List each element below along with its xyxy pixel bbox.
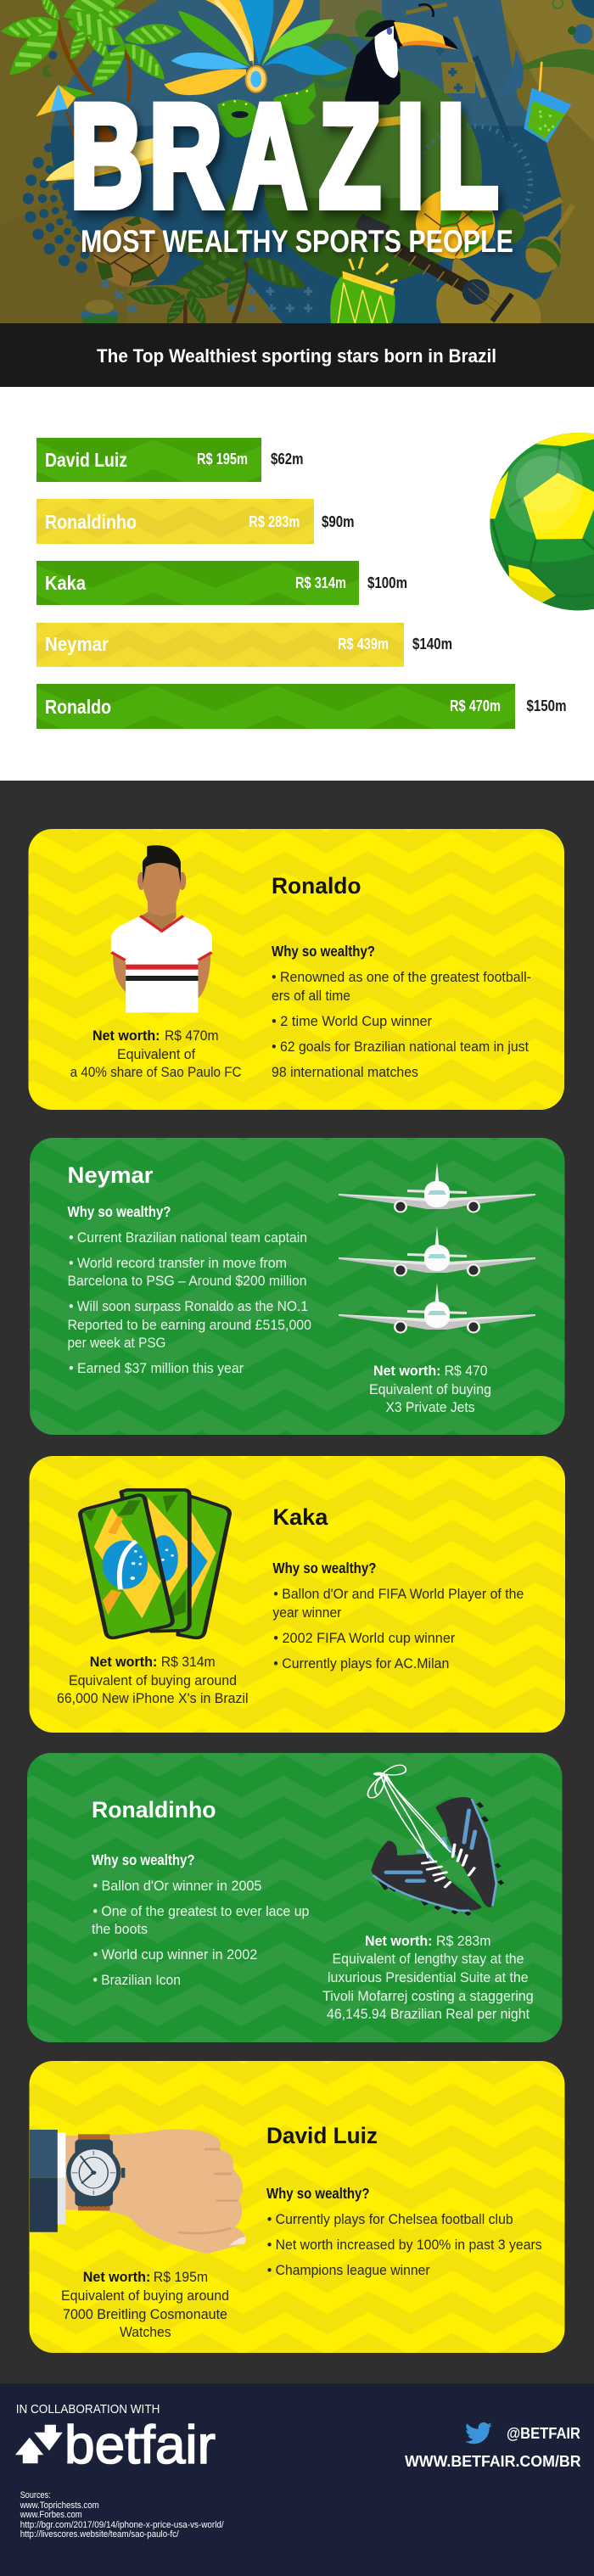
sources: Sources: [20,2490,51,2500]
net worth caption [57,1654,248,1706]
why so wealthy list: per week at PSG [68,1335,166,1351]
net worth caption [322,1933,534,2022]
why so wealthy list: Why so wealthy? [266,2185,370,2202]
right half [330,4,573,323]
net worth caption: Equivalent of [117,1046,195,1062]
net worth caption: Equivalent of buying around [61,2288,229,2304]
collaboration label: IN COLLABORATION WITH [16,2402,160,2416]
why so wealthy list: Why so wealthy? [92,1851,195,1868]
icon: hanging football boots [367,1765,502,1915]
heading bar [0,323,594,387]
bar: Ronaldo: R$ 470m [450,697,501,714]
net worth caption: a 40% share of Sao Paulo FC [70,1064,242,1080]
bright football [416,188,495,259]
why so wealthy list [266,2185,542,2278]
why so wealthy list: year winner [272,1604,342,1621]
net worth caption: R$ 470 [445,1363,488,1379]
net worth caption: R$ 470m [165,1028,219,1044]
dots [23,36,89,273]
why so wealthy list: Reported to be earning around £515,000 [68,1317,311,1333]
net worth caption: 66,000 New iPhone X's in Brazil [57,1690,248,1706]
umbrella [66,112,75,138]
bar: David Luiz: R$ 195m [197,451,248,468]
twitter handle: @BETFAIR [507,2425,580,2442]
headdress feathers [205,0,255,66]
why so wealthy list: • Current Brazilian national team captain [69,1229,307,1246]
net worth caption: Tivoli Mofarrej costing a staggering [322,1988,534,2004]
bar: Kaka [36,561,407,605]
icon: twitter bird [465,2422,492,2444]
icon: green and yellow football [486,430,594,617]
why so wealthy list: • 2002 FIFA World cup winner [273,1630,456,1646]
why so wealthy list: • Currently plays for AC.Milan [273,1655,449,1672]
hero banner [0,0,594,328]
hero illustration: carnival scene [0,0,594,328]
why so wealthy list: ers of all time [272,988,350,1004]
net worth caption: Net worth: [83,2269,150,2285]
bar: Neymar: $140m [412,636,452,652]
bar: Kaka: Kaka [45,572,86,594]
bar: Ronaldo: $150m [526,697,567,714]
net worth caption [70,1028,242,1080]
name heading: David Luiz [266,2123,378,2148]
net worth caption [61,2269,229,2340]
net worth caption: Equivalent of lengthy stay at the [333,1951,524,1967]
net worth caption: Net worth: [373,1363,441,1379]
maracas [520,199,562,221]
subtitle: most wealthy sports people: MOST WEALTHY SPORTS PEOPLE [81,224,513,259]
why so wealthy list: • Net worth increased by 100% in past 3 years [267,2237,542,2253]
palm fronds [10,21,59,75]
bar: Kaka: R$ 314m [295,574,346,591]
name heading: Ronaldo [272,873,361,899]
net worth caption: Net worth: [90,1654,157,1670]
why so wealthy list: • 2 time World Cup winner [272,1013,432,1029]
icon: three private jets [339,1162,535,1334]
why so wealthy list: • World record transfer in move from [69,1255,287,1271]
name heading: Neymar [68,1162,154,1188]
panel: Ronaldo [29,829,564,1110]
plus marks [101,280,312,312]
palm trunks [58,21,93,95]
panel: wealth ranking bar chart [0,387,594,781]
why so wealthy list: • Renowned as one of the greatest football- [272,969,531,985]
why so wealthy list: Why so wealthy? [272,943,375,960]
net worth caption: 7000 Breitling Cosmonaute [63,2306,227,2322]
bar: Ronaldinho [36,499,355,544]
toucan [406,4,447,13]
bar: David Luiz: David Luiz [45,449,127,471]
bar: Ronaldinho: Ronaldinho [45,511,137,533]
bar: Ronaldo: Ronaldo [45,696,111,718]
sources: www.Toprichests.com [20,2500,99,2511]
bar: David Luiz [36,438,304,482]
why so wealthy list: • Ballon d'Or winner in 2005 [92,1878,261,1894]
panel: Ronaldinho [27,1753,562,2042]
sources: http://livescores.website/team/sao-paulo-fc/ [20,2529,180,2540]
why so wealthy list: • Will soon surpass Ronaldo as the NO.1 [69,1298,308,1314]
net worth caption: R$ 314m [161,1654,216,1670]
net worth caption [369,1363,491,1415]
why so wealthy list: Why so wealthy? [68,1203,171,1220]
net worth caption: X3 Private Jets [385,1399,475,1415]
why so wealthy list [92,1851,309,1988]
bar: David Luiz: $62m [271,451,304,468]
bar: Neymar: R$ 439m [338,636,389,652]
website: WWW.BETFAIR.COM/BR [405,2453,581,2470]
icon: wristwatch on arm [30,2129,246,2254]
bar: Ronaldinho: $90m [322,513,355,530]
bar: Ronaldinho: R$ 283m [249,513,300,530]
why so wealthy list: Why so wealthy? [272,1560,376,1576]
logo: betfair: betfair [64,2416,216,2475]
sources: www.Forbes.com [20,2510,82,2520]
why so wealthy list [68,1203,311,1376]
why so wealthy list: Barcelona to PSG – Around $200 million [68,1273,307,1289]
icon: three iPhones with Brazilian flag [80,1490,230,1638]
dark lower palms [233,261,246,323]
net worth caption: R$ 195m [154,2269,208,2285]
small drum left [81,314,119,323]
panel: Neymar [30,1138,565,1435]
dim football left [93,216,170,287]
why so wealthy list: • World cup winner in 2002 [92,1946,257,1963]
heading text: The Top Wealthiest sporting stars born in Brazil [97,345,496,367]
sources: http://bgr.com/2017/09/14/iphone-x-price-usa-vs-world/ [20,2520,225,2530]
name heading: Ronaldinho [92,1797,216,1823]
why so wealthy list: • Currently plays for Chelsea football club [267,2211,513,2227]
why so wealthy list: • Brazilian Icon [92,1972,181,1988]
why so wealthy list: • One of the greatest to ever lace up [92,1903,309,1919]
panel: Kaka [29,1456,565,1733]
bar: Neymar: Neymar [45,633,109,655]
why so wealthy list: the boots [92,1921,148,1937]
net worth caption: Net worth: [92,1028,160,1044]
net worth caption: Equivalent of buying around [69,1672,237,1688]
carnival mask [218,99,257,137]
net worth caption: Watches [120,2324,171,2340]
why so wealthy list [272,1560,524,1672]
bar: Neymar [36,623,452,667]
why so wealthy list: 98 international matches [272,1064,418,1080]
bar: Kaka: $100m [367,574,407,591]
net worth caption: Net worth: [365,1933,433,1949]
icon: player in Sao Paulo shirt [111,845,212,1012]
footer [0,2383,594,2576]
why so wealthy list [272,943,531,1080]
net worth caption: 46,145.94 Brazilian Real per night [327,2006,530,2022]
bar: Ronaldo [36,684,567,729]
name heading: Kaka [272,1504,328,1530]
why so wealthy list: • Ballon d'Or and FIFA World Player of the [273,1586,524,1602]
net worth caption: Equivalent of buying [369,1381,491,1397]
title: BRAZIL: BRAZIL [70,75,498,238]
surfboard [45,137,159,181]
why so wealthy list: • Champions league winner [267,2262,430,2278]
net worth caption: R$ 283m [436,1933,490,1949]
samba drum [330,276,395,323]
panel: David Luiz [29,2061,565,2353]
juice cup [539,62,541,104]
why so wealthy list: • 62 goals for Brazilian national team in just [272,1039,529,1055]
guitar [436,257,541,323]
net worth caption: luxurious Presidential Suite at the [328,1969,529,1985]
why so wealthy list: • Earned $37 million this year [69,1360,244,1376]
sources [20,2490,225,2540]
